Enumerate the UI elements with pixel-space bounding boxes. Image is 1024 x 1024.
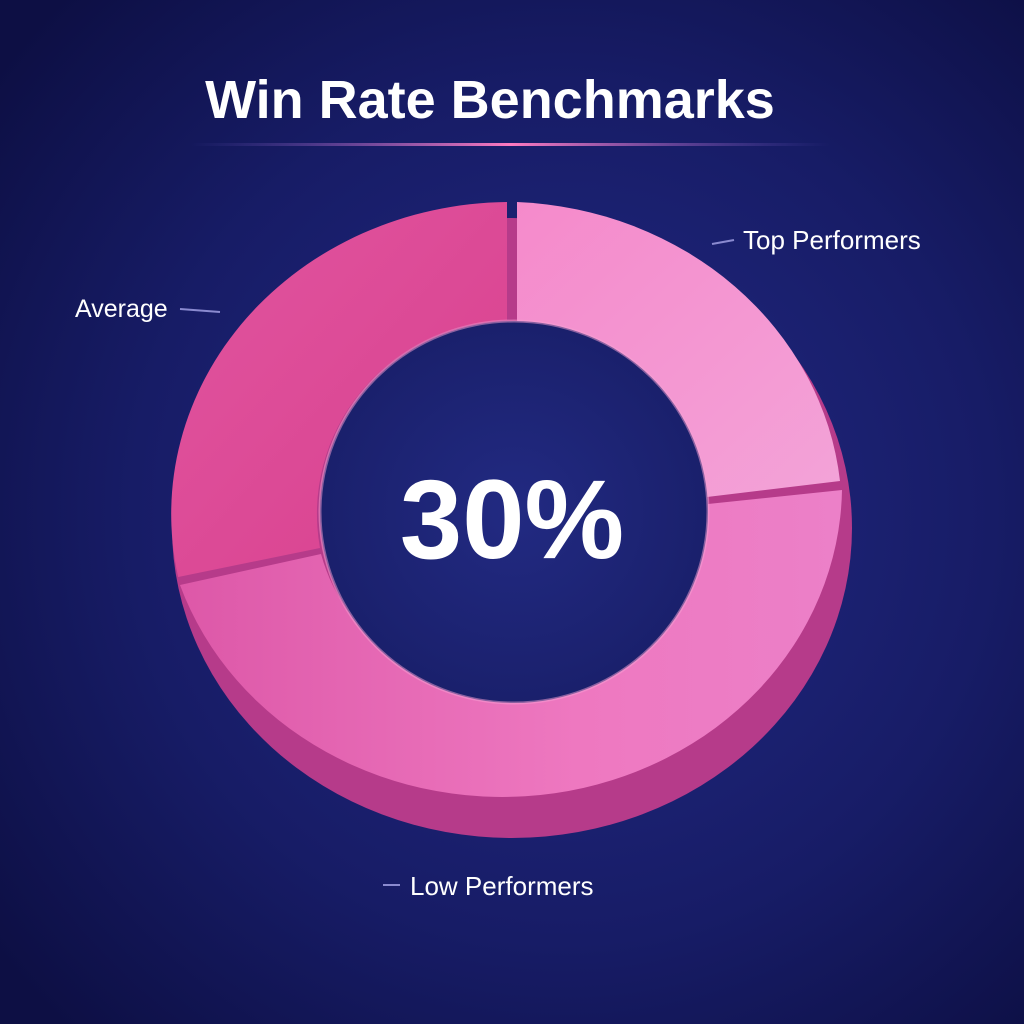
- donut chart: [171, 202, 852, 838]
- inner hole: [320, 321, 708, 703]
- label: low performers: Low Performers: [410, 871, 594, 901]
- center value: 30%: [400, 457, 624, 582]
- segment: top performers: [517, 202, 840, 497]
- label: average: Average: [75, 295, 168, 323]
- segment: low performers: [180, 490, 842, 797]
- segment: average: [171, 202, 507, 577]
- title: Win Rate Benchmarks: [205, 70, 775, 130]
- 3D thickness: [172, 218, 852, 838]
- label: average: [75, 295, 220, 323]
- label: top performers: Top Performers: [743, 225, 921, 255]
